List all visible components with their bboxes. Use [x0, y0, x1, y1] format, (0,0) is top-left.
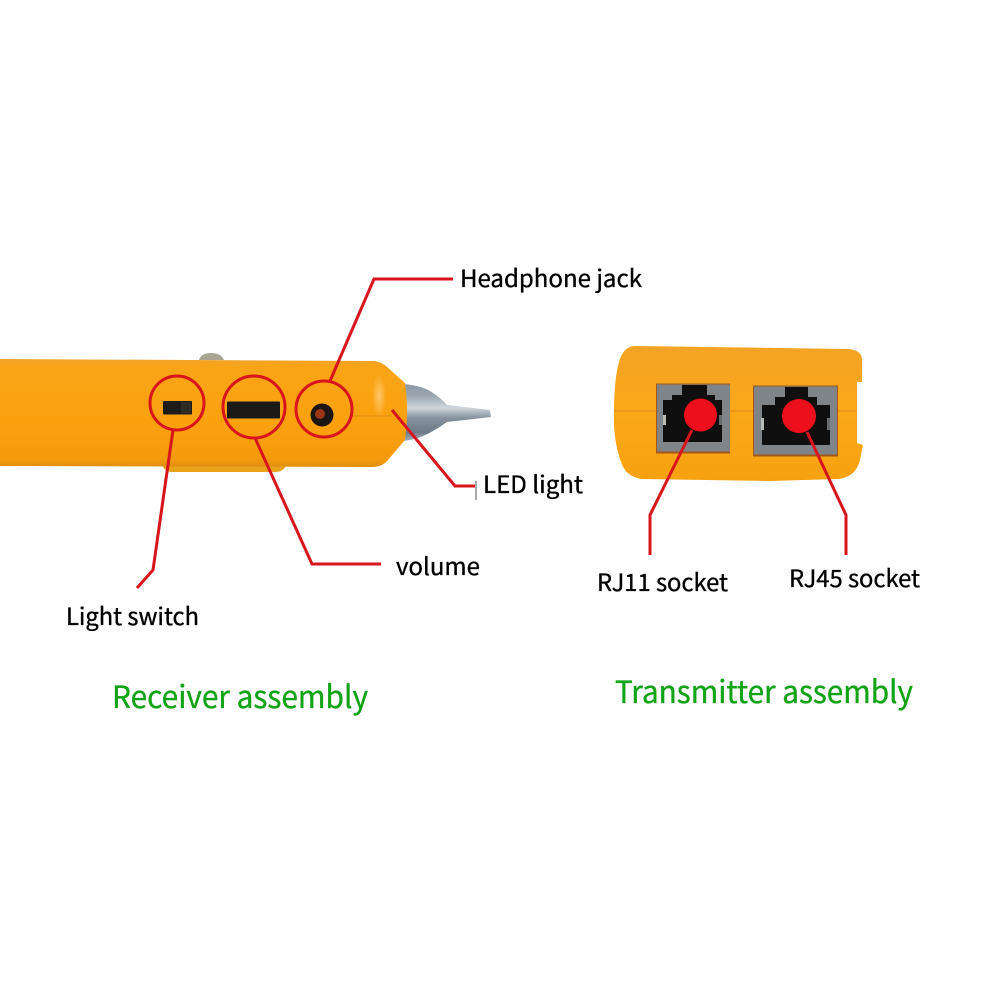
callout lines: [137, 279, 846, 588]
metal tip: [404, 384, 491, 441]
seam: [352, 415, 392, 417]
label: Headphone jack: Headphone jack: [460, 259, 642, 294]
receiver device: [0, 353, 491, 472]
seam: [614, 410, 857, 412]
device body: [0, 359, 407, 467]
volume wheel slot: [227, 402, 280, 418]
heading: Receiver assembly: Receiver assembly: [112, 672, 368, 717]
transmitter device: [614, 346, 863, 481]
circle: headphone jack: [296, 381, 352, 437]
RJ45 red dot: [782, 399, 816, 433]
bottom grip: [162, 465, 286, 472]
LED tick: [475, 481, 477, 500]
line: headphone jack: [330, 279, 453, 381]
label: volume: volume: [396, 547, 480, 582]
label: LED light: LED light: [483, 465, 583, 500]
RJ45 socket: [753, 386, 838, 456]
top button: [199, 353, 224, 360]
transmitter body: [614, 346, 863, 481]
light switch slot: [163, 401, 192, 414]
label: RJ11 socket: RJ11 socket: [597, 563, 728, 598]
circle: light switch: [150, 376, 204, 430]
line: LED light: [392, 410, 475, 486]
line: light switch: [137, 430, 173, 588]
line: volume: [255, 438, 381, 564]
shoulder highlight: [372, 374, 386, 418]
line: RJ45: [807, 432, 846, 555]
heading: Transmitter assembly: Transmitter assembly: [615, 667, 913, 712]
RJ11 red dot: [684, 398, 717, 432]
label: RJ45 socket: RJ45 socket: [789, 559, 920, 594]
label: Light switch: Light switch: [66, 597, 199, 632]
circle: volume: [223, 376, 285, 438]
RJ11 socket: [656, 384, 730, 454]
headphone jack hole: [310, 404, 334, 426]
line: RJ11: [650, 430, 692, 555]
